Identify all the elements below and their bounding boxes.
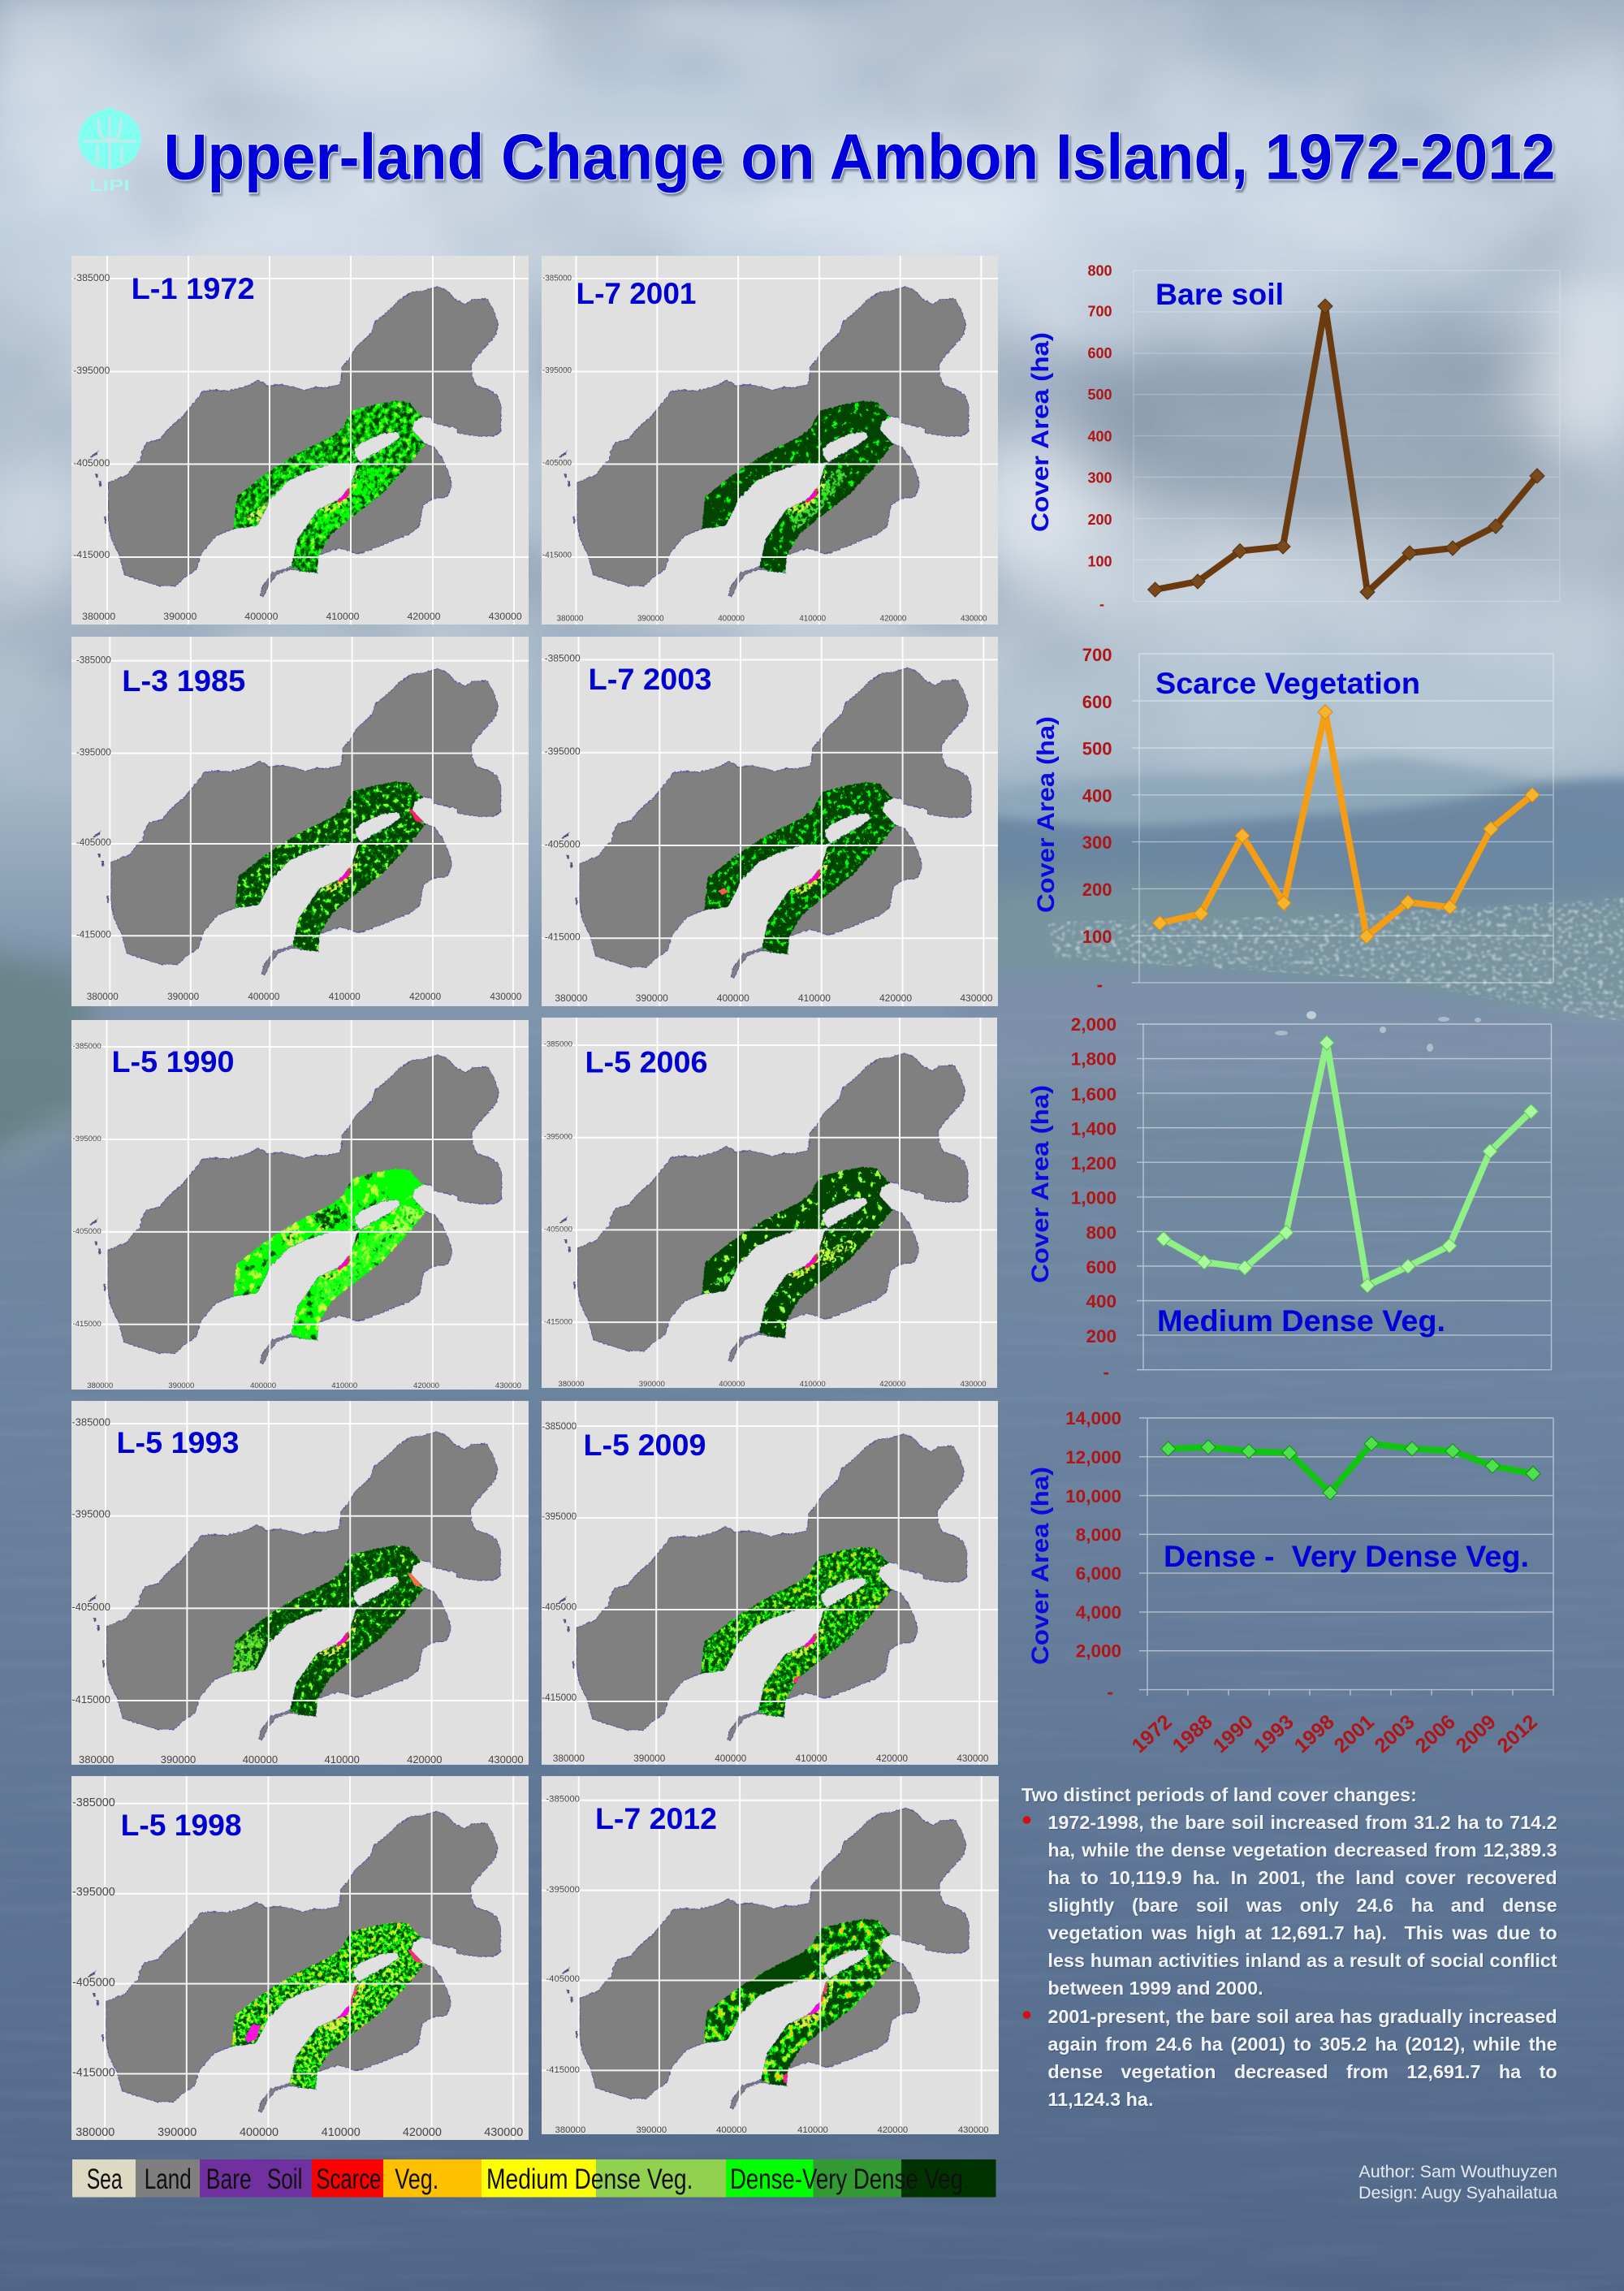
chart: dense to very dense vegetation: 2001 bbox=[1330, 1710, 1379, 1757]
text block: land cover change notes: vegetation was high at 12,691.7 ha). This was due to bbox=[1047, 1922, 1557, 1943]
text block: land cover change notes: between 1999 and 2000. bbox=[1047, 1978, 1263, 1999]
text block: land cover change notes: ha, while the dense vegetation decreased from 12,389.3 bbox=[1047, 1839, 1557, 1861]
credits bbox=[1358, 2162, 1557, 2202]
panel: map L-3 1985: 420000 bbox=[409, 992, 442, 1002]
panel: map L-7 2012: 430000 bbox=[958, 2125, 989, 2135]
panel: map L-1 1972 bbox=[71, 256, 529, 625]
panel: map L-1 1972: -405000 bbox=[73, 457, 110, 469]
panel: map L-5 2006: -415000 bbox=[544, 1318, 572, 1327]
panel: map L-5 2006: -405000 bbox=[544, 1225, 572, 1234]
credits: Design: Augy Syahailatua bbox=[1358, 2183, 1557, 2202]
panel: map L-3 1985: 410000 bbox=[329, 992, 361, 1002]
panel: map L-5 1990: -405000 bbox=[72, 1227, 102, 1236]
text block: land cover change notes: 1972-1998, the bare soil increased from 31.2 ha to 714.2 bbox=[1047, 1812, 1557, 1833]
panel: map L-5 1998: 390000 bbox=[158, 2126, 197, 2139]
panel: map L-7 2012 bbox=[542, 1776, 999, 2135]
panel: map L-5 1990: 380000 bbox=[87, 1381, 113, 1390]
panel: map L-7 2001: 410000 bbox=[799, 614, 827, 623]
panel: map L-3 1985: L-3 1985 bbox=[122, 664, 245, 698]
panel: map L-5 2006: 390000 bbox=[639, 1380, 665, 1389]
panel: map L-7 2012: -405000 bbox=[546, 1974, 580, 1984]
chart: dense to very dense vegetation: 12,000 bbox=[1065, 1447, 1121, 1468]
panel: map L-5 1993: 420000 bbox=[407, 1753, 442, 1766]
text block: land cover change notes: dense vegetation decreased from 12,691.7 ha to bbox=[1047, 2061, 1557, 2082]
panel: map L-5 1998: -415000 bbox=[72, 2067, 115, 2080]
chart: dense to very dense vegetation: 14,000 bbox=[1065, 1408, 1121, 1429]
panel: map L-5 2009 bbox=[542, 1401, 998, 1765]
panel: map L-5 1993: 380000 bbox=[79, 1753, 114, 1766]
text block: land cover change notes: 2001-present, the bare soil area has gradually increased bbox=[1047, 2006, 1557, 2027]
panel: map L-7 2012: 410000 bbox=[797, 2125, 828, 2135]
chart: bare soil: 600 bbox=[1087, 345, 1112, 361]
legend: land cover classes: Veg. bbox=[395, 2163, 438, 2195]
chart: medium dense vegetation: 600 bbox=[1086, 1257, 1116, 1277]
panel: map L-7 2001: -395000 bbox=[542, 366, 572, 375]
title: Upper-land Change on Ambon Island, 1972-2012 bbox=[164, 120, 1556, 193]
chart: dense to very dense vegetation: 2,000 bbox=[1076, 1641, 1121, 1662]
panel: map L-5 1990 bbox=[71, 1020, 529, 1390]
panel: map L-5 1993: 400000 bbox=[243, 1753, 278, 1766]
panel: map L-5 1993: -405000 bbox=[71, 1601, 110, 1613]
panel: map L-3 1985: 390000 bbox=[167, 992, 200, 1002]
panel: map L-7 2001: 390000 bbox=[637, 614, 664, 623]
chart: dense to very dense vegetation: 1993 bbox=[1250, 1710, 1298, 1757]
panel: map L-1 1972: 380000 bbox=[82, 611, 115, 622]
panel: map L-7 2003: L-7 2003 bbox=[588, 663, 711, 696]
panel: map L-5 1993: 430000 bbox=[488, 1753, 524, 1766]
chart: bare soil: Bare soil bbox=[1155, 278, 1284, 311]
panel: map L-1 1972: -385000 bbox=[73, 272, 110, 283]
text block: land cover change notes: ha to 10,119.9 ha. In 2001, the land cover recovered bbox=[1047, 1867, 1557, 1888]
panel: map L-7 2003: -395000 bbox=[545, 746, 581, 757]
panel: map L-7 2001: 420000 bbox=[880, 614, 907, 623]
chart: scarce vegetation: 600 bbox=[1082, 692, 1112, 712]
panel: map L-3 1985: 380000 bbox=[87, 992, 119, 1002]
chart: dense to very dense vegetation: 1998 bbox=[1290, 1710, 1339, 1757]
chart: dense to very dense vegetation: 1988 bbox=[1168, 1710, 1217, 1757]
chart: scarce vegetation: 400 bbox=[1082, 786, 1112, 806]
panel: map L-5 1998: 410000 bbox=[322, 2126, 361, 2139]
chart: dense to very dense vegetation bbox=[1027, 1408, 1553, 1757]
panel: map L-7 2003 bbox=[542, 637, 998, 1006]
chart: bare soil: 700 bbox=[1087, 304, 1112, 320]
panel: map L-5 2009: 420000 bbox=[876, 1753, 908, 1764]
panel: map L-5 1993: -415000 bbox=[71, 1693, 110, 1705]
panel: map L-3 1985: 400000 bbox=[248, 992, 280, 1002]
legend: land cover classes: Soil bbox=[267, 2163, 302, 2195]
panel: map L-1 1972: 400000 bbox=[244, 611, 279, 622]
panel: map L-5 1998: 420000 bbox=[403, 2126, 442, 2139]
text block: land cover change notes: again from 24.6 ha (2001) to 305.2 ha (2012), while the bbox=[1047, 2034, 1557, 2055]
chart: medium dense vegetation bbox=[1027, 1014, 1551, 1382]
panel: map L-5 2006: -385000 bbox=[544, 1040, 572, 1048]
panel: map L-7 2003: 430000 bbox=[960, 992, 993, 1004]
chart: bare soil: 400 bbox=[1087, 429, 1112, 445]
panel: map L-5 1990: L-5 1990 bbox=[112, 1045, 234, 1078]
panel: map L-5 2006 bbox=[542, 1018, 997, 1389]
panel: map L-5 1998: -405000 bbox=[72, 1977, 115, 1990]
chart: scarce vegetation: 100 bbox=[1082, 927, 1112, 947]
chart: bare soil: 100 bbox=[1087, 554, 1112, 570]
panel: map L-5 1993: 410000 bbox=[325, 1753, 360, 1766]
panel: map L-1 1972: 420000 bbox=[407, 611, 441, 622]
panel: map L-5 1990: -385000 bbox=[72, 1042, 102, 1051]
panel: map L-5 1993: 390000 bbox=[161, 1753, 196, 1766]
panel: map L-7 2012: 400000 bbox=[716, 2125, 747, 2135]
chart: medium dense vegetation: 1,800 bbox=[1071, 1049, 1116, 1070]
panel: map L-5 2006: 410000 bbox=[800, 1380, 826, 1389]
panel: map L-5 2009: 410000 bbox=[796, 1753, 827, 1764]
legend: land cover classes: Medium Dense Veg. bbox=[486, 2163, 693, 2195]
panel: map L-5 2006: 400000 bbox=[719, 1380, 745, 1389]
legend: land cover classes: Sea bbox=[87, 2163, 123, 2195]
chart: dense to very dense vegetation: 1972 bbox=[1128, 1710, 1177, 1757]
panel: map L-3 1985 bbox=[71, 637, 529, 1006]
panel: map L-5 2006: L-5 2006 bbox=[585, 1046, 708, 1078]
panel: map L-5 1998: 430000 bbox=[484, 2126, 523, 2139]
panel: map L-5 2009: L-5 2009 bbox=[583, 1429, 706, 1462]
panel: map L-5 1998: -395000 bbox=[72, 1886, 115, 1899]
chart: medium dense vegetation: - bbox=[1103, 1362, 1109, 1382]
chart: scarce vegetation: 700 bbox=[1082, 645, 1112, 665]
chart: bare soil: - bbox=[1099, 596, 1104, 612]
bullets: red markers for the notes bbox=[1023, 1816, 1030, 2019]
chart: dense to very dense vegetation: 2003 bbox=[1371, 1710, 1419, 1757]
chart: bare soil: 200 bbox=[1087, 512, 1112, 528]
panel: map L-5 2009: -405000 bbox=[542, 1602, 577, 1613]
chart: scarce vegetation: 200 bbox=[1082, 880, 1112, 900]
text block: land cover change notes: 11,124.3 ha. bbox=[1047, 2089, 1153, 2110]
panel: map L-5 1998 bbox=[71, 1776, 529, 2140]
panel: map L-3 1985: -395000 bbox=[76, 747, 111, 758]
chart: medium dense vegetation: Medium Dense Veg. bbox=[1157, 1304, 1445, 1338]
chart: bare soil: 800 bbox=[1087, 263, 1112, 279]
chart: medium dense vegetation: 2,000 bbox=[1071, 1014, 1116, 1035]
panel: map L-7 2012: -415000 bbox=[546, 2065, 580, 2075]
chart: scarce vegetation: 300 bbox=[1082, 832, 1112, 853]
chart: dense to very dense vegetation: 8,000 bbox=[1076, 1525, 1121, 1545]
text block: land cover change notes: Two distinct periods of land cover changes: bbox=[1021, 1784, 1417, 1805]
panel: map L-5 1993: L-5 1993 bbox=[117, 1426, 239, 1459]
chart: scarce vegetation: 500 bbox=[1082, 739, 1112, 759]
panel: map L-1 1972: 430000 bbox=[489, 611, 522, 622]
text block: land cover change notes bbox=[1021, 1784, 1557, 2110]
panel: map L-1 1972: -395000 bbox=[73, 365, 110, 376]
panel: map L-7 2001: 430000 bbox=[961, 614, 987, 623]
panel: map L-5 2006: -395000 bbox=[544, 1132, 572, 1141]
panel: map L-5 1993: -395000 bbox=[71, 1508, 110, 1520]
panel: map L-7 2012: 390000 bbox=[636, 2125, 667, 2135]
panel: map L-5 2006: 380000 bbox=[558, 1380, 584, 1389]
chart: medium dense vegetation: 1,600 bbox=[1071, 1084, 1116, 1104]
panel: map L-5 1990: -415000 bbox=[72, 1320, 102, 1329]
panel: map L-7 2001 bbox=[542, 256, 998, 625]
chart: dense to very dense vegetation: 2009 bbox=[1452, 1710, 1501, 1757]
panel: map L-5 2009: 380000 bbox=[553, 1753, 585, 1764]
legend: land cover classes bbox=[72, 2159, 996, 2198]
chart: bare soil: Cover Area (ha) bbox=[1027, 332, 1054, 532]
panel: map L-5 1998: 400000 bbox=[240, 2126, 279, 2139]
chart: medium dense vegetation: 800 bbox=[1086, 1223, 1116, 1243]
panel: map L-5 2009: -385000 bbox=[542, 1421, 577, 1432]
panel: map L-7 2003: 390000 bbox=[636, 992, 668, 1004]
panel: map L-7 2001: -415000 bbox=[542, 551, 572, 560]
legend: land cover classes: Bare bbox=[206, 2163, 252, 2195]
panel: map L-5 1990: 430000 bbox=[495, 1381, 521, 1390]
panel: map L-7 2012: 380000 bbox=[555, 2125, 585, 2135]
panel: map L-1 1972: -415000 bbox=[73, 549, 110, 560]
chart: scarce vegetation: Cover Area (ha) bbox=[1033, 716, 1060, 913]
chart: scarce vegetation: - bbox=[1097, 975, 1103, 995]
legend: land cover classes: Land bbox=[145, 2163, 192, 2195]
panel: map L-7 2012: -395000 bbox=[546, 1885, 580, 1895]
panel: map L-7 2001: -405000 bbox=[542, 459, 572, 468]
panel: map L-5 2006: 430000 bbox=[961, 1380, 987, 1389]
panel: map L-5 2009: 430000 bbox=[957, 1753, 989, 1764]
panel: map L-5 2009: -395000 bbox=[542, 1511, 577, 1522]
chart: medium dense vegetation: 1,000 bbox=[1071, 1187, 1116, 1208]
panel: map L-5 1990: 410000 bbox=[331, 1381, 357, 1390]
chart: dense to very dense vegetation: - bbox=[1108, 1682, 1113, 1702]
text block: land cover change notes: less human activities inland as a result of social conflict bbox=[1047, 1950, 1557, 1971]
panel: map L-7 2012: 420000 bbox=[877, 2125, 908, 2135]
chart: dense to very dense vegetation: 1990 bbox=[1209, 1710, 1258, 1757]
chart: medium dense vegetation: Cover Area (ha) bbox=[1027, 1085, 1054, 1283]
chart: dense to very dense vegetation: 4,000 bbox=[1076, 1602, 1121, 1623]
panel: map L-7 2001: 400000 bbox=[718, 614, 745, 623]
panel: map L-1 1972: L-1 1972 bbox=[132, 272, 255, 305]
chart: dense to very dense vegetation: 6,000 bbox=[1076, 1563, 1121, 1584]
panel: map L-7 2003: 380000 bbox=[555, 992, 588, 1004]
credits: Author: Sam Wouthuyzen bbox=[1358, 2162, 1557, 2181]
panel: map L-5 1990: 390000 bbox=[168, 1381, 194, 1390]
panel: map L-7 2003: -385000 bbox=[545, 652, 581, 664]
panel: map L-3 1985: -405000 bbox=[76, 837, 111, 848]
panel: map L-1 1972: 390000 bbox=[163, 611, 197, 622]
panel: map L-5 1990: 420000 bbox=[413, 1381, 439, 1390]
panel: map L-3 1985: -385000 bbox=[76, 655, 111, 666]
logo: LIPI emblem bbox=[78, 107, 141, 195]
panel: map L-7 2003: -415000 bbox=[545, 931, 581, 942]
panel: map L-5 1990: -395000 bbox=[72, 1135, 102, 1143]
panel: map L-5 1993 bbox=[71, 1401, 529, 1766]
panel: map L-7 2003: 400000 bbox=[717, 992, 749, 1004]
chart: dense to very dense vegetation: Dense - Very Dense Veg. bbox=[1164, 1540, 1529, 1573]
chart: scarce vegetation bbox=[1033, 645, 1553, 995]
panel: map L-5 2009: 390000 bbox=[633, 1753, 666, 1764]
panel: map L-5 1998: 380000 bbox=[76, 2126, 114, 2139]
chart: medium dense vegetation: 200 bbox=[1086, 1326, 1116, 1347]
logo: LIPI emblem: LIPI bbox=[89, 178, 130, 195]
chart: medium dense vegetation: 400 bbox=[1086, 1291, 1116, 1312]
panel: map L-5 1998: L-5 1998 bbox=[121, 1809, 242, 1842]
panel: map L-5 2009: -415000 bbox=[542, 1692, 577, 1703]
panel: map L-7 2001: L-7 2001 bbox=[577, 277, 697, 310]
chart: dense to very dense vegetation: Cover Area (ha) bbox=[1027, 1467, 1054, 1665]
panel: map L-5 2009: 400000 bbox=[715, 1753, 747, 1764]
chart: bare soil bbox=[1027, 263, 1560, 612]
panel: map L-7 2012: -385000 bbox=[546, 1794, 580, 1804]
chart: medium dense vegetation: 1,400 bbox=[1071, 1119, 1116, 1139]
chart: dense to very dense vegetation: 2012 bbox=[1493, 1710, 1542, 1757]
panel: map L-7 2001: 380000 bbox=[557, 614, 584, 623]
panel: map L-5 1993: -385000 bbox=[71, 1416, 110, 1428]
text block: land cover change notes: slightly (bare soil was only 24.6 ha and dense bbox=[1047, 1895, 1557, 1916]
legend: land cover classes: Scarce bbox=[316, 2163, 381, 2195]
panel: map L-5 1990: 400000 bbox=[250, 1381, 276, 1390]
panel: map L-1 1972: 410000 bbox=[326, 611, 360, 622]
panel: map L-7 2001: -385000 bbox=[542, 274, 572, 283]
chart: dense to very dense vegetation: 10,000 bbox=[1065, 1486, 1121, 1506]
panel: map L-3 1985: -415000 bbox=[76, 930, 111, 940]
panel: map L-7 2003: -405000 bbox=[545, 838, 581, 849]
chart: scarce vegetation: Scarce Vegetation bbox=[1155, 667, 1420, 700]
panel: map L-7 2003: 420000 bbox=[879, 992, 912, 1004]
panel: map L-5 2006: 420000 bbox=[879, 1380, 905, 1389]
panel: map L-3 1985: 430000 bbox=[490, 992, 522, 1002]
legend: land cover classes: Dense-Very Dense Veg. bbox=[730, 2163, 970, 2195]
chart: bare soil: 300 bbox=[1087, 469, 1112, 486]
panel: map L-7 2012: L-7 2012 bbox=[595, 1802, 717, 1835]
panel: map L-7 2003: 410000 bbox=[798, 992, 831, 1004]
chart: bare soil: 500 bbox=[1087, 387, 1112, 403]
chart: dense to very dense vegetation: 2006 bbox=[1411, 1710, 1460, 1757]
panel: map L-5 1998: -385000 bbox=[72, 1796, 115, 1809]
chart: medium dense vegetation: 1,200 bbox=[1071, 1153, 1116, 1174]
